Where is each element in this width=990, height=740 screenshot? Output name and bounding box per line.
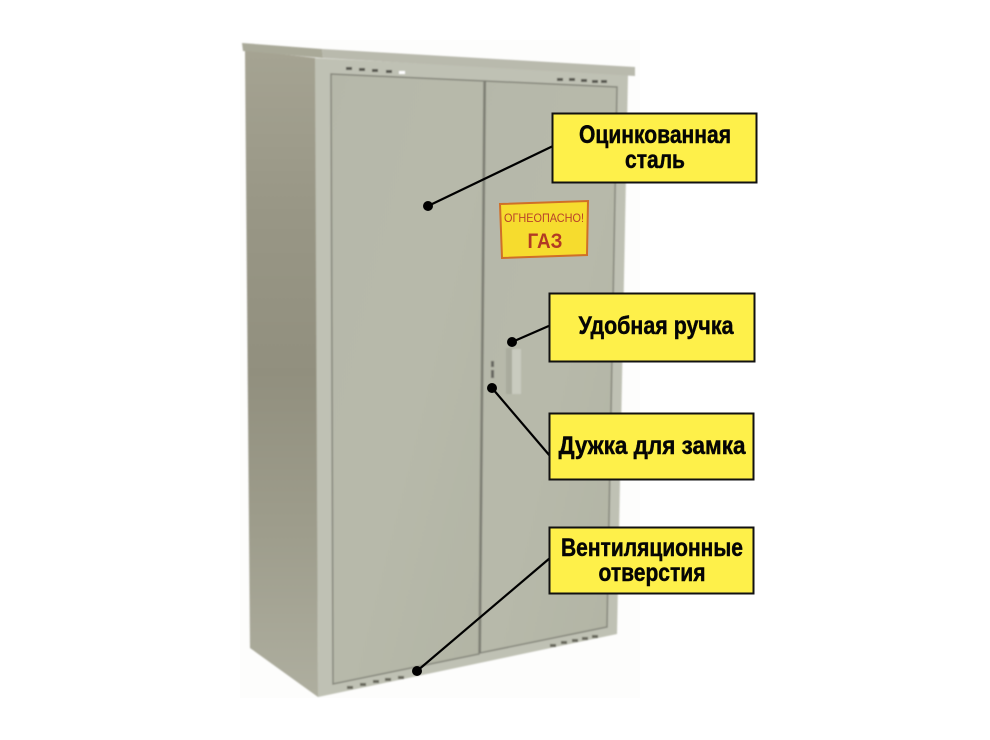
bottom vents [347,635,598,689]
left door [331,74,484,684]
door gap [480,81,485,653]
callout: galvanized steel [552,114,756,182]
pointer: galvanized steel [423,146,553,211]
callout: ventilation holes: отверстия [598,559,706,587]
cabinet roof [242,43,635,76]
top vents [346,67,607,83]
cabinet side panel [245,50,318,697]
warning sign: ОГНЕОПАСНО! [504,211,584,225]
warning sign [500,201,588,258]
pointer: lock loop [487,383,550,456]
lock loop [491,361,494,378]
pointer: vents [412,558,550,676]
callout: handle [550,294,754,362]
callout: lock loop: Дужка для замка [558,432,746,460]
callout: handle: Удобная ручка [578,312,734,340]
right door [480,81,617,653]
callout: ventilation holes [550,528,754,594]
photo background [240,40,640,698]
callout: galvanized steel: Оцинкованная [579,121,731,149]
callout: ventilation holes: Вентиляционные [561,534,743,562]
callout: lock loop [550,414,754,480]
warning sign: ГАЗ [528,230,562,253]
door handle [506,348,521,394]
cabinet photo [242,43,635,697]
cabinet front frame [315,58,628,697]
pointer: handle [507,325,551,347]
callout: galvanized steel: сталь [625,146,685,174]
